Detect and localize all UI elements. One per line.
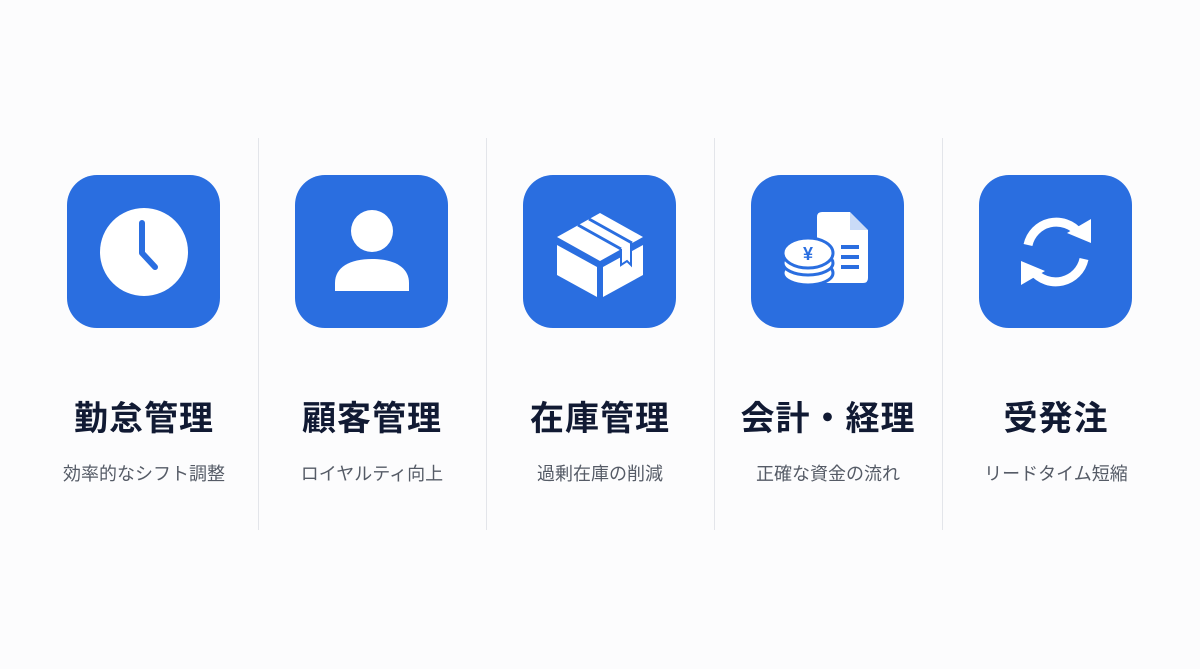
heading: 勤怠管理	[74, 400, 214, 438]
icon: coins and document	[751, 175, 904, 328]
panel: attendance	[63, 175, 225, 484]
icon: sync arrows	[979, 175, 1132, 328]
text: 効率的なシフト調整	[63, 464, 225, 484]
icon: person	[295, 175, 448, 328]
text: リードタイム短縮	[984, 464, 1128, 484]
heading: 会計・経理	[740, 400, 916, 438]
panel: customer	[295, 175, 448, 484]
panel: accounting	[740, 175, 916, 484]
heading: 在庫管理	[530, 400, 670, 438]
icon: clock	[67, 175, 220, 328]
text: 正確な資金の流れ	[756, 464, 900, 484]
panel: orders	[979, 175, 1132, 484]
heading: 顧客管理	[302, 400, 442, 438]
panel: inventory	[523, 175, 676, 484]
text: 過剰在庫の削減	[537, 464, 663, 484]
icon: box	[523, 175, 676, 328]
icon: coins and document: ¥	[803, 244, 813, 264]
text: ロイヤルティ向上	[301, 464, 443, 484]
heading: 受発注	[1004, 400, 1108, 438]
